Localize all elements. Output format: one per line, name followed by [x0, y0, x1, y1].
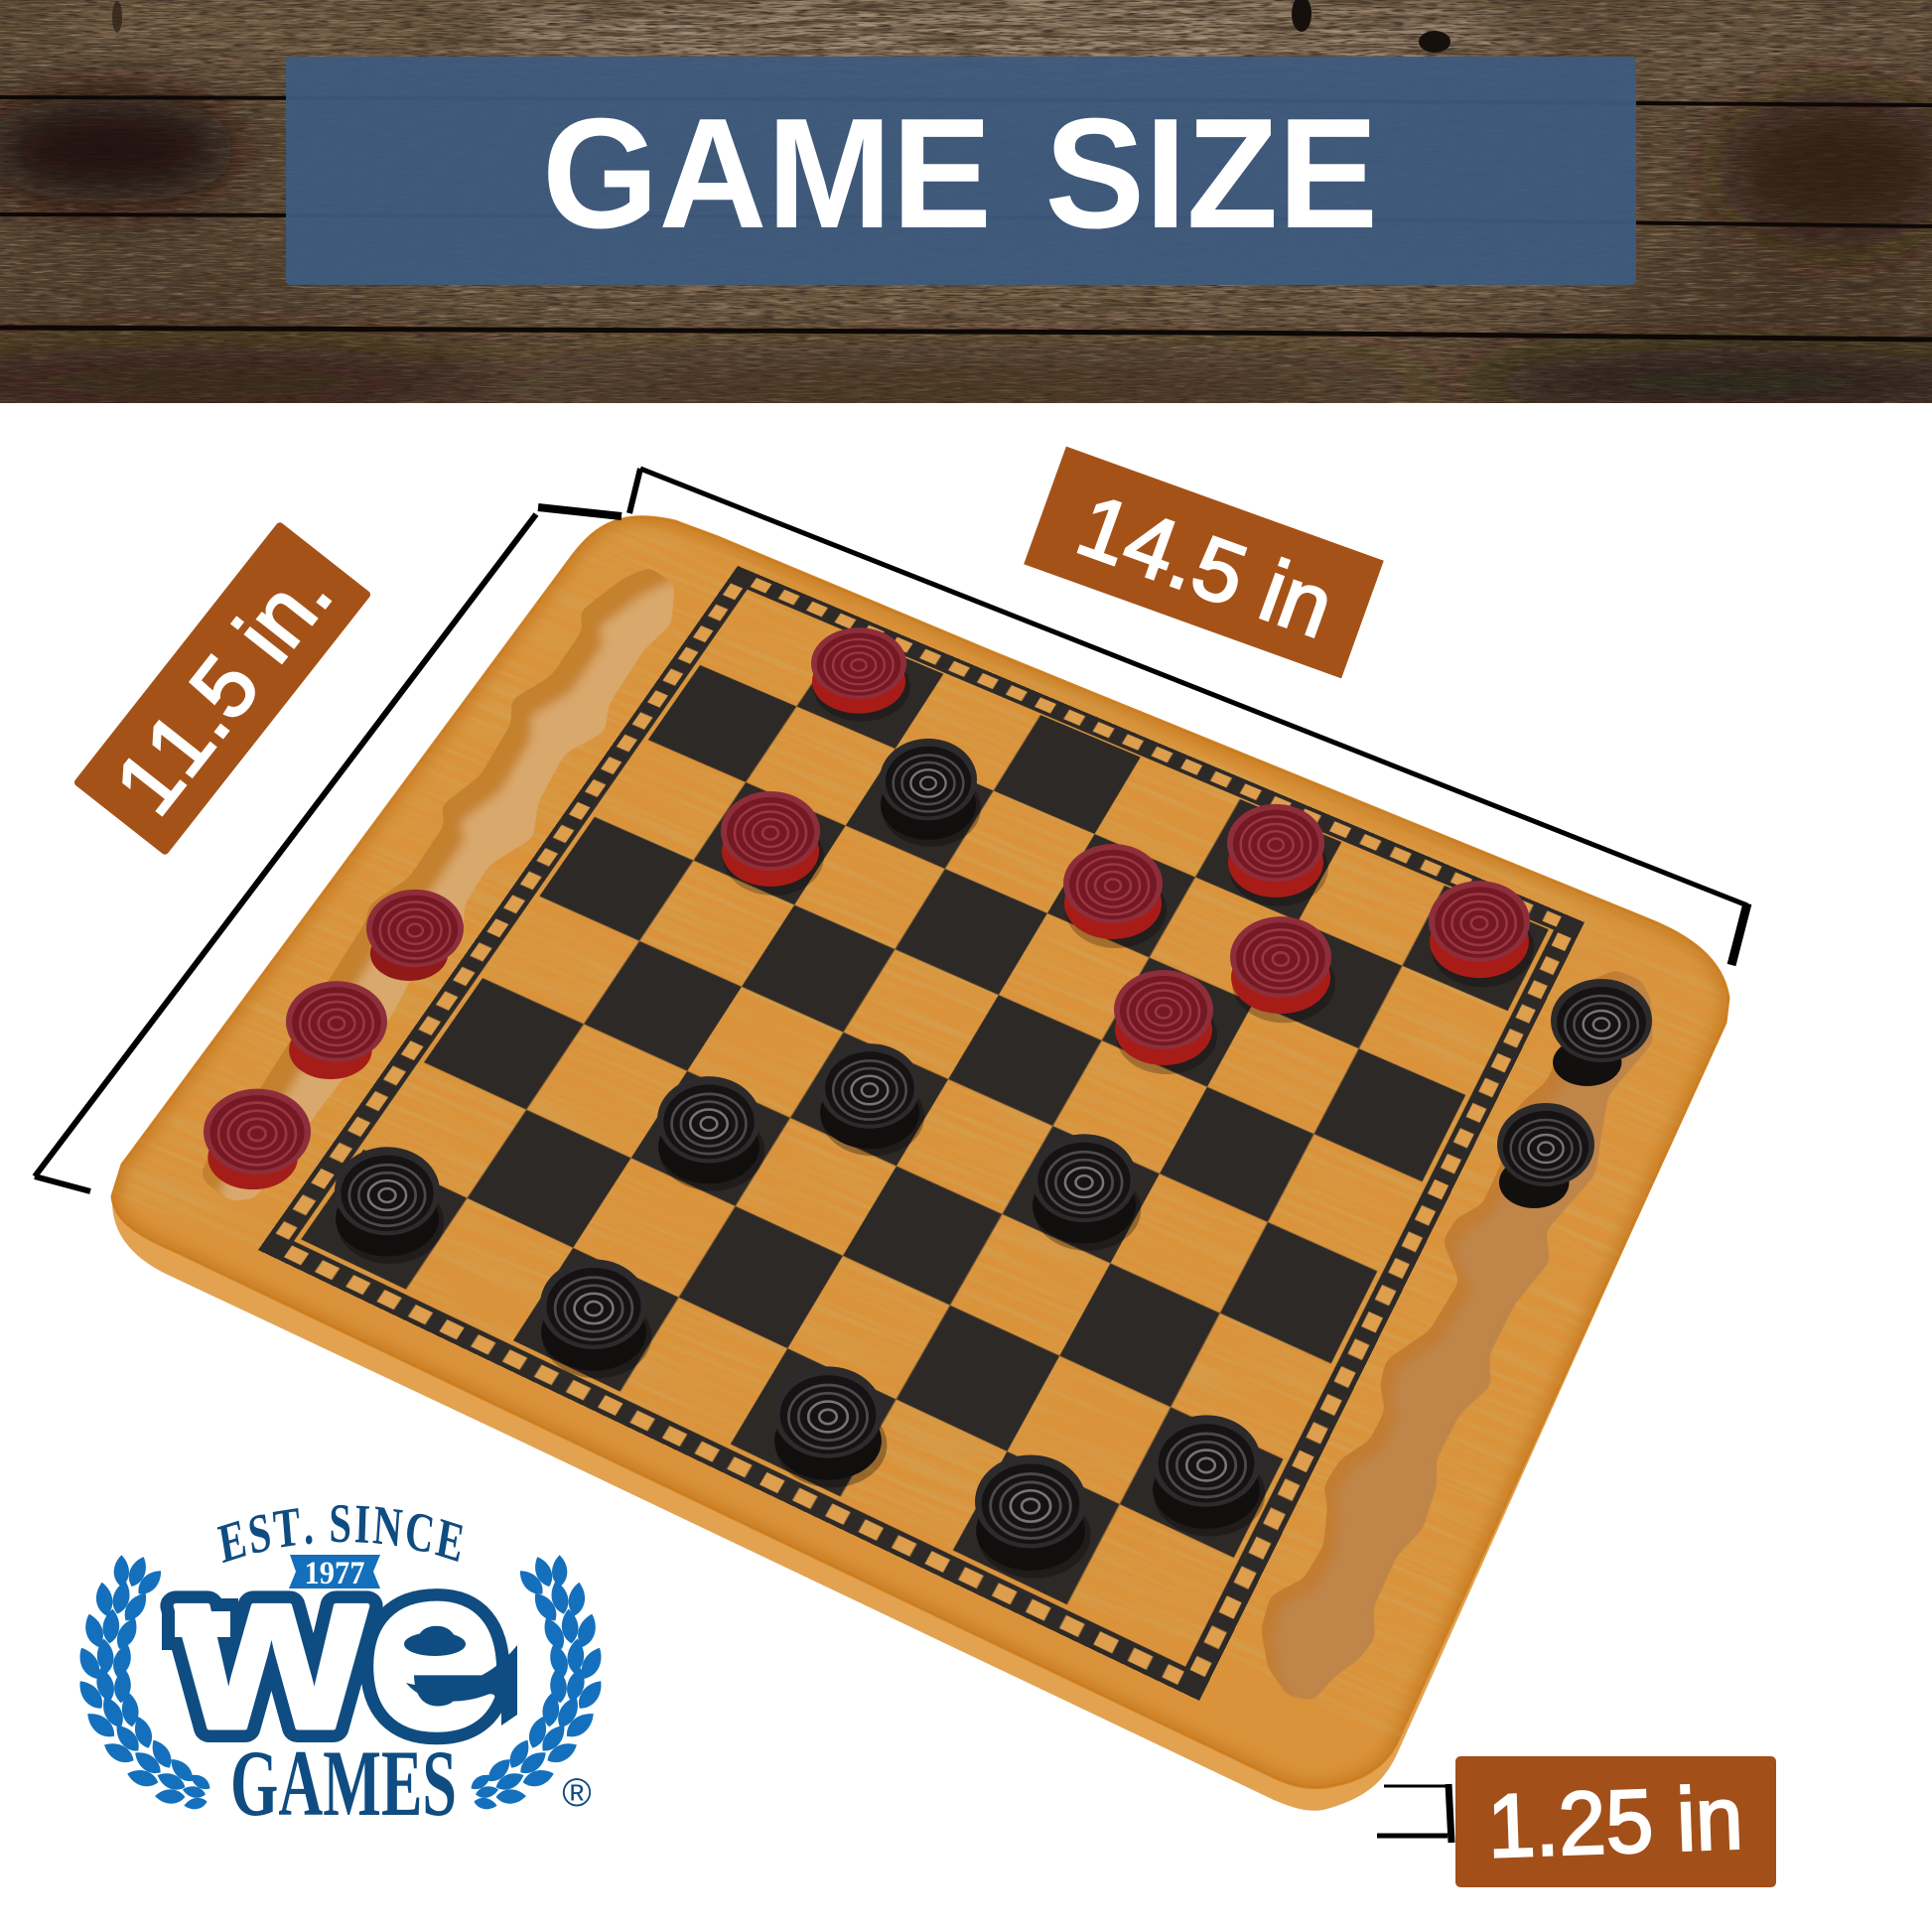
red checkers on board: [721, 627, 1534, 1074]
dimension bracket: height: [1377, 1784, 1451, 1843]
right piece tray: [1251, 963, 1668, 1711]
logo: WE Games: [79, 1505, 602, 1836]
title text: GAME SIZE: [542, 86, 1378, 261]
black checkers on board: [335, 739, 1265, 1579]
label: 14.5 in: [1024, 447, 1384, 678]
EST. SINCE arc text: EST. SINCE: [216, 1505, 463, 1563]
we wordmark: [162, 1520, 517, 1777]
dimension line: width: [35, 507, 621, 1191]
dimension line: length: [629, 469, 1747, 965]
1977 ribbon: 1977: [304, 1556, 365, 1591]
registered mark: ®: [562, 1771, 592, 1815]
wood header background: [0, 0, 1932, 418]
black checkers in right tray: [1497, 979, 1652, 1208]
label: 1.25 in: 1.25 in: [1486, 1769, 1744, 1876]
laurel right: [467, 1546, 611, 1816]
left piece tray: [203, 569, 675, 1201]
wooden board: [111, 515, 1729, 1811]
red checkers in left tray: [204, 890, 464, 1189]
label: 14.5 in: 14.5 in: [1065, 476, 1346, 656]
board playing grid and checkered border: [258, 566, 1585, 1701]
laurel left: [70, 1546, 214, 1816]
title banner: [286, 57, 1636, 285]
label: 11.5 in.: 11.5 in.: [95, 546, 350, 832]
1977 ribbon: [289, 1555, 380, 1591]
GAMES text: GAMES: [230, 1730, 457, 1836]
